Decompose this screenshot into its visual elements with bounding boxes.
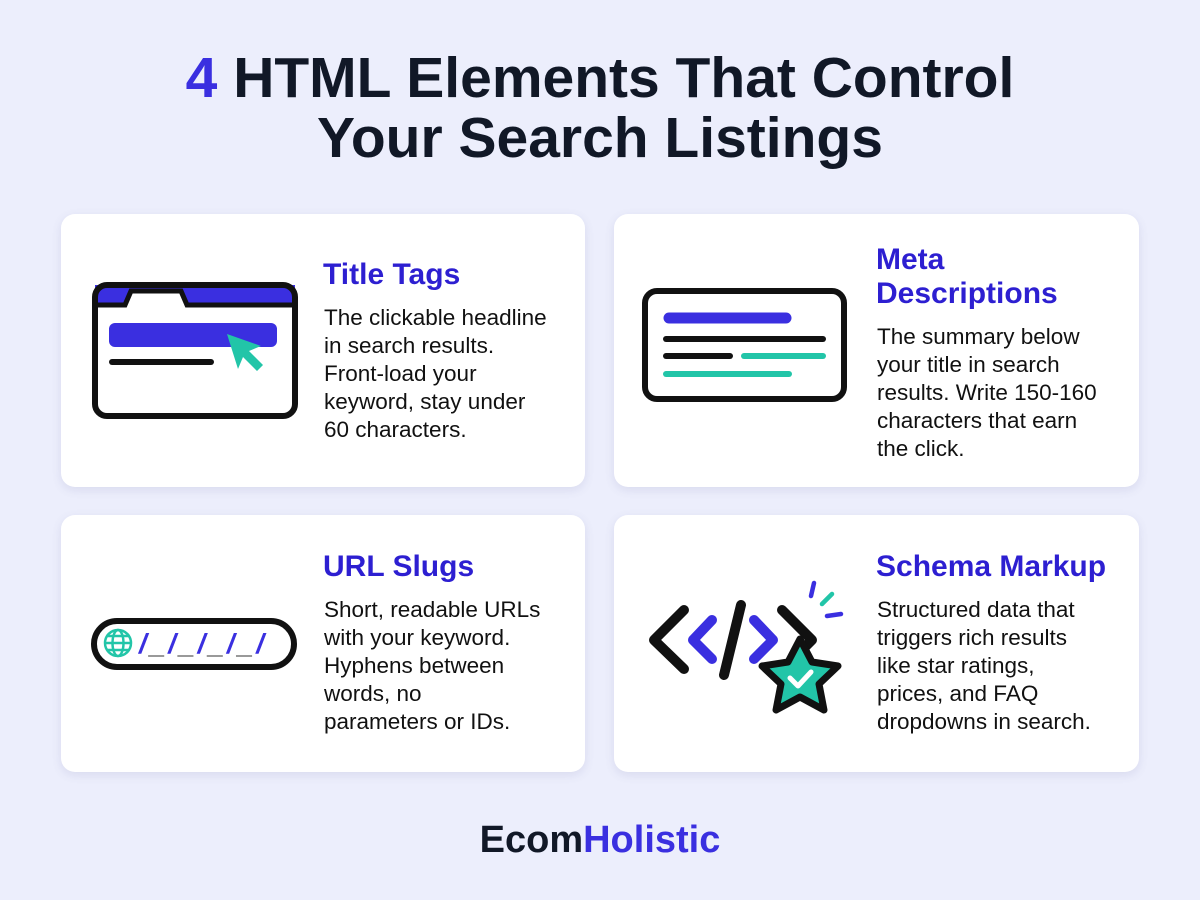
footer logo: EcomHolistic xyxy=(480,819,720,861)
title xyxy=(186,46,1014,170)
text block: Front-load your xyxy=(324,361,477,386)
title: Your Search Listings xyxy=(317,106,883,170)
text block: Hyphens between xyxy=(324,653,504,678)
icon: browser with cursor xyxy=(92,282,298,419)
icon: code brackets with star xyxy=(649,580,844,714)
panel: schema markup xyxy=(614,515,1139,772)
title: 4 HTML Elements That Control xyxy=(186,46,1014,110)
icon: snippet box xyxy=(642,288,847,402)
text block: your title in search xyxy=(877,352,1060,377)
text block: Short, readable URLs xyxy=(324,597,540,622)
text block: keyword, stay under xyxy=(324,389,525,414)
panel: title tags xyxy=(61,214,585,487)
heading: Meta xyxy=(876,243,944,276)
text block: parameters or IDs. xyxy=(324,709,510,734)
text block xyxy=(324,305,547,442)
panel: url slugs xyxy=(61,515,585,772)
text block: dropdowns in search. xyxy=(877,709,1091,734)
text block: words, no xyxy=(324,681,422,706)
panel: meta descriptions xyxy=(614,214,1139,487)
text block: results. Write 150-160 xyxy=(877,380,1097,405)
text block: prices, and FAQ xyxy=(877,681,1038,706)
icon: url bar xyxy=(91,618,297,670)
text block: The clickable headline xyxy=(324,305,547,330)
text block: with your keyword. xyxy=(324,625,510,650)
text block: triggers rich results xyxy=(877,625,1067,650)
text block xyxy=(324,597,540,734)
heading: URL Slugs xyxy=(323,550,474,583)
text block xyxy=(877,324,1097,461)
text block: 60 characters. xyxy=(324,417,467,442)
text block: Structured data that xyxy=(877,597,1075,622)
heading: Descriptions xyxy=(876,277,1058,310)
heading: Title Tags xyxy=(323,258,460,291)
text block: the click. xyxy=(877,436,965,461)
heading: Schema Markup xyxy=(876,550,1106,583)
text block: characters that earn xyxy=(877,408,1077,433)
text block: in search results. xyxy=(324,333,494,358)
icon: url bar: /_/_/_/_/ xyxy=(137,628,267,659)
heading xyxy=(876,243,1058,310)
text block: The summary below xyxy=(877,324,1080,349)
text block: like star ratings, xyxy=(877,653,1035,678)
text block xyxy=(877,597,1091,734)
